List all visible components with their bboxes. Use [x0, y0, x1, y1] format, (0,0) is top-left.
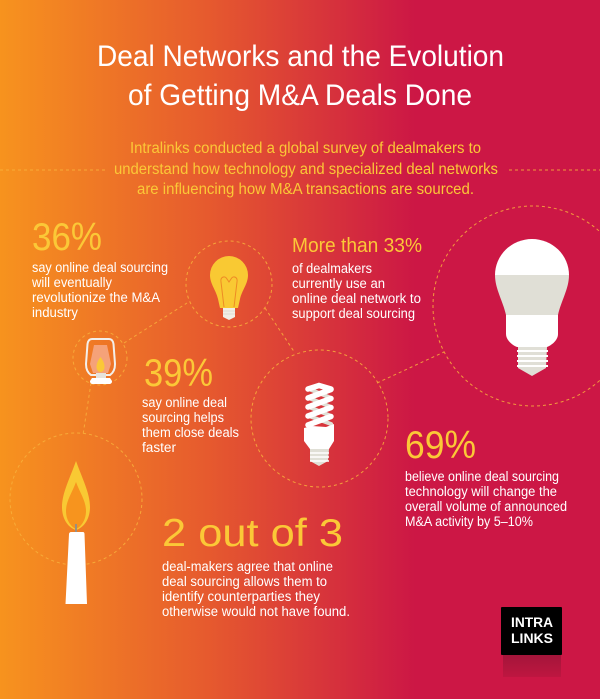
icon: candle	[62, 461, 90, 604]
icon: incandescent bulb	[210, 256, 248, 320]
logo: Intralinks: INTRA	[511, 615, 553, 630]
icon: oil lantern	[86, 339, 115, 384]
intro text: Intralinks conducted a global survey of dealmakers to	[130, 140, 481, 157]
icon: LED bulb	[495, 239, 569, 376]
stat: 36%	[31, 216, 168, 320]
stat: 69%: believe online deal sourcing	[405, 469, 559, 484]
stat: 69%	[405, 424, 567, 529]
stat: 2 out of 3	[162, 512, 350, 619]
stat: more than 33%: of dealmakers	[292, 261, 372, 276]
stat: more than 33%: More than 33%	[292, 235, 422, 257]
logo: Intralinks: LINKS	[511, 631, 553, 646]
stat: 39%: 39%	[144, 352, 213, 395]
stat: 39%	[142, 352, 239, 455]
title: of Getting M&A Deals Done	[128, 79, 472, 112]
stat: 2 out of 3: 2 out of 3	[162, 512, 343, 555]
stat: 69%: 69%	[405, 424, 476, 467]
title: Deal Networks and the Evolution	[97, 40, 504, 73]
stat: 36%: say online deal sourcing	[32, 260, 168, 275]
intro text: are influencing how M&A transactions are sourced.	[137, 181, 474, 198]
logo: Intralinks	[501, 607, 562, 677]
stat: 2 out of 3: deal sourcing allows them to	[162, 574, 327, 589]
stat: 39%: say online deal	[142, 395, 227, 410]
stat: 36%: revolutionize the M&A	[32, 290, 160, 305]
stat: 39%: faster	[142, 440, 177, 455]
stat: 36%: 36%	[32, 216, 102, 259]
stat: 36%: will eventually	[31, 275, 112, 290]
stat: more than 33%	[292, 235, 422, 321]
stat: 69%: technology will change the	[405, 484, 557, 499]
title	[97, 40, 504, 112]
stat: more than 33%: currently use an	[292, 276, 385, 291]
stat: 2 out of 3: deal-makers agree that online	[162, 559, 333, 574]
stat: 69%: overall volume of announced	[405, 499, 567, 514]
stat: 39%: sourcing helps	[142, 410, 224, 425]
stat: 2 out of 3: identify counterparties they	[162, 589, 320, 604]
stat: 69%: M&A activity by 5–10%	[405, 514, 533, 529]
stat: 36%: industry	[32, 305, 78, 320]
stat: more than 33%: support deal sourcing	[292, 306, 415, 321]
stat: 39%: them close deals	[142, 425, 239, 440]
stat: 2 out of 3: otherwise would not have found.	[162, 604, 350, 619]
intro text: understand how technology and specialized deal networks	[114, 161, 498, 178]
icon: compact fluorescent bulb	[304, 386, 334, 466]
intro text	[114, 140, 498, 198]
stat: more than 33%: online deal network to	[292, 291, 421, 306]
